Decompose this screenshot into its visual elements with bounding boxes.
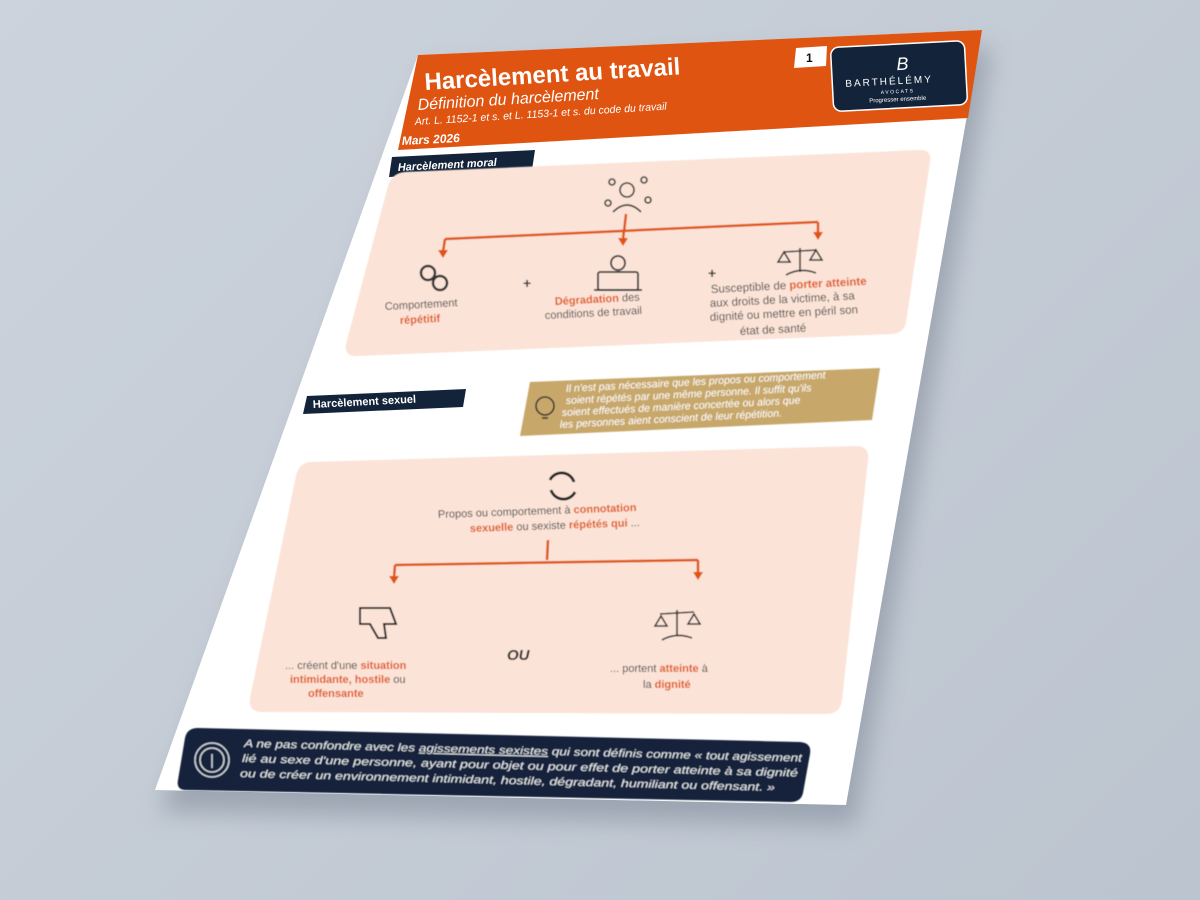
label: Harcelement moral bbox=[389, 150, 535, 177]
text: porter atteinte bbox=[710, 276, 867, 338]
icon: lightbulb bbox=[536, 397, 554, 418]
label: Harcelement sexuel bbox=[303, 389, 466, 414]
icon: scales bbox=[778, 248, 822, 275]
text: situation intimidante: ... créent d'une situation bbox=[285, 660, 407, 672]
logo: Progresser ensemble bbox=[869, 96, 927, 105]
page bbox=[155, 30, 982, 805]
text: degradation: conditions de travail bbox=[545, 305, 642, 322]
callout: gold note: Il n'est pas nécessaire que les propos ou comportement bbox=[566, 369, 827, 395]
text: atteinte dignite: la dignité bbox=[643, 679, 691, 691]
panel: harcelement moral bbox=[346, 150, 930, 356]
label: Harcelement sexuel: Harcèlement sexuel bbox=[313, 394, 416, 411]
text: porter atteinte: aux droits de la victime, à sa bbox=[710, 290, 856, 310]
page number tab: 1 bbox=[806, 51, 813, 65]
text: comportement repetitif bbox=[385, 297, 458, 327]
page number tab bbox=[794, 46, 827, 68]
text: propos: Propos ou comportement à connotation bbox=[438, 502, 637, 521]
icon: thumbs down bbox=[360, 608, 396, 638]
text: atteinte dignite: ... portent atteinte à bbox=[610, 663, 709, 675]
text: comportement repetitif: répétitif bbox=[400, 313, 441, 327]
icon: harassed person bbox=[605, 177, 651, 212]
panel: harcelement sexuel bbox=[250, 446, 868, 714]
callout: agissements sexistes bbox=[178, 728, 810, 802]
text: degradation: Dégradation des bbox=[555, 292, 641, 308]
icon: worker at computer bbox=[594, 256, 642, 290]
text: atteinte dignite bbox=[610, 663, 709, 691]
arrows: tree bbox=[438, 214, 823, 258]
header bar bbox=[398, 30, 982, 150]
text: porter atteinte: état de santé bbox=[740, 323, 807, 338]
page shadow bbox=[160, 48, 992, 825]
text: propos: sexuelle ou sexiste répétés qui ... bbox=[470, 517, 640, 535]
plus: + bbox=[708, 265, 716, 281]
text: degradation bbox=[545, 292, 642, 322]
text: porter atteinte: dignité ou mettre en péril son bbox=[710, 304, 858, 324]
plus: + bbox=[523, 275, 531, 291]
text: ou: OU bbox=[507, 647, 531, 664]
article reference: Art. L. 1152-1 et s. et L. 1153-1 et s. du code du travail bbox=[413, 101, 668, 128]
callout: agissements sexistes: lié au sexe d'une personne, ayant pour objet ou pour effet de porter atteinte à sa dignité bbox=[242, 753, 798, 780]
text: situation intimidante bbox=[285, 660, 407, 700]
title: Harcèlement au travail bbox=[424, 53, 681, 96]
logo: B bbox=[896, 54, 909, 74]
icon: scales bbox=[655, 610, 700, 640]
text: comportement repetitif: Comportement bbox=[385, 297, 458, 313]
callout: gold note: soient répétés par une même personne. Il suffit qu'ils bbox=[566, 382, 813, 407]
icon: cycle arrows bbox=[550, 473, 575, 499]
icon: repeat links bbox=[421, 266, 447, 290]
logo: AVOCATS bbox=[881, 88, 915, 96]
callout: gold note: soient effectués de manière concertée ou alors que bbox=[562, 395, 801, 419]
label: Harcelement moral: Harcèlement moral bbox=[398, 157, 498, 174]
subtitle: Définition du harcèlement bbox=[417, 86, 600, 114]
callout: gold note bbox=[520, 368, 880, 436]
callout: gold note: les personnes aient conscient de leur répétition. bbox=[560, 407, 782, 431]
text: propos bbox=[438, 502, 640, 535]
icon: info bbox=[195, 743, 229, 777]
callout: agissements sexistes: A ne pas confondre avec les agissements sexistes qui sont définis comme « tout agissement bbox=[243, 738, 803, 765]
text: porter atteinte: Susceptible de porter atteinte bbox=[711, 276, 867, 296]
arrows: branch bbox=[389, 540, 703, 584]
text: situation intimidante: intimidante, hostile ou bbox=[290, 674, 406, 686]
date: Mars 2026 bbox=[401, 131, 460, 148]
text: situation intimidante: offensante bbox=[308, 688, 364, 700]
logo bbox=[830, 41, 968, 112]
callout: agissements sexistes: ou de créer un environnement intimidant, hostile, dégradant, humiliant ou offensant. » bbox=[240, 768, 775, 794]
logo: BARTHÉLÉMY bbox=[845, 72, 933, 90]
